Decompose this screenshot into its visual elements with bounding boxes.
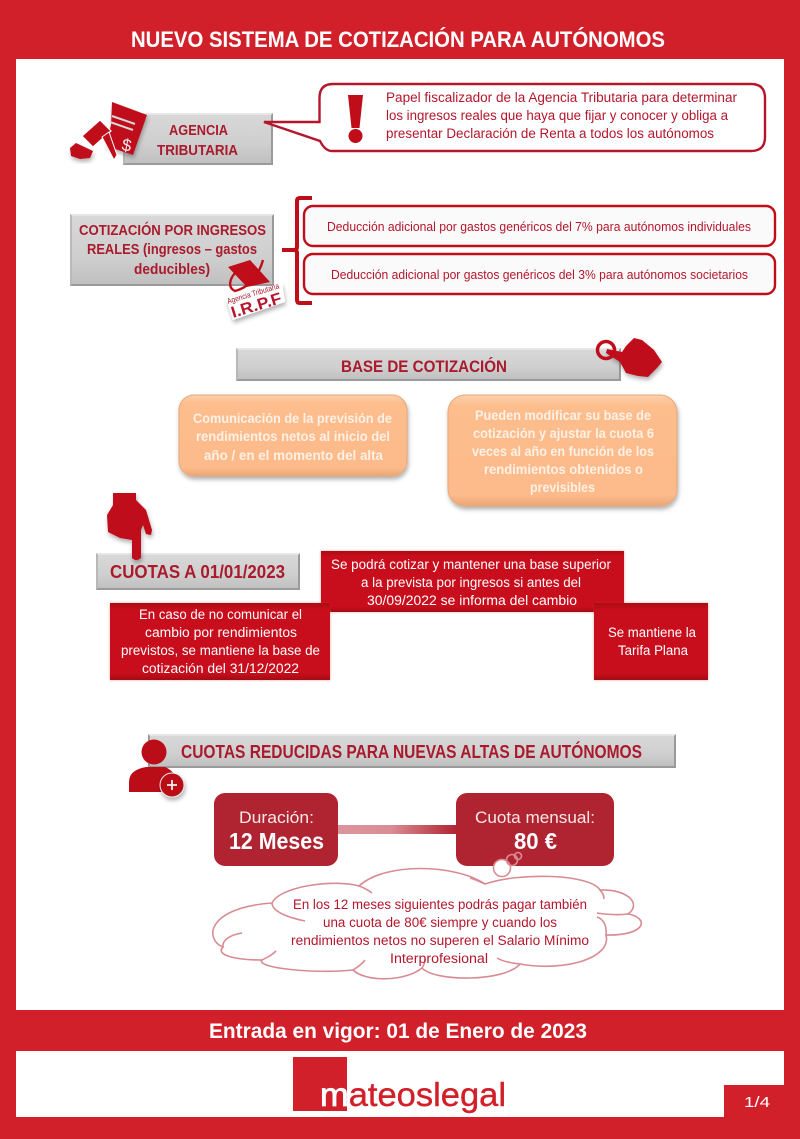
panel: no comunicar cambio: cambio por rendimientos	[145, 625, 297, 640]
panel: base superior: Se podrá cotizar y mantener una base superior	[331, 557, 611, 572]
footer heading: Entrada en vigor: 01 de Enero de 2023	[209, 1020, 587, 1043]
panel: tarifa plana: Tarifa Plana	[618, 643, 688, 658]
icon: IRPF stamp	[226, 260, 285, 322]
panel: tarifa plana	[594, 603, 708, 680]
heading: cuotas a 01/01/2023: CUOTAS A 01/01/2023	[110, 562, 285, 582]
connector	[338, 825, 456, 834]
icon: gavel and tax document	[70, 102, 147, 160]
page number: 1/4	[744, 1094, 770, 1111]
panel: no comunicar cambio	[110, 603, 330, 680]
panel: duración	[214, 793, 338, 866]
panel: comunicación de la previsión: rendimientos netos al inicio del	[196, 429, 390, 444]
icon: hand pointing down	[107, 493, 152, 560]
panel: no comunicar cambio: previstos, se mantiene la base de	[121, 643, 320, 658]
panel: base superior: a la prevista por ingresos si antes del	[361, 575, 581, 590]
icon: user with plus	[129, 740, 184, 797]
title: NUEVO SISTEMA DE COTIZACIÓN PARA AUTÓNOMOS	[131, 27, 665, 52]
cloud callout: rendimientos netos no superen el Salario Mínimo	[291, 933, 589, 948]
callout text	[386, 90, 737, 141]
heading: base de cotización: BASE DE COTIZACIÓN	[341, 357, 507, 376]
callout text: Papel fiscalizador de la Agencia Tributaria para determinar	[386, 90, 737, 105]
panel: comunicación de la previsión: año / en el momento del alta	[204, 448, 383, 463]
panel: cuota mensual	[456, 793, 614, 866]
heading: base de cotización	[236, 348, 621, 381]
icon: IRPF stamp: Agencia Tributaria	[226, 281, 281, 306]
heading: cuotas reducidas	[148, 734, 676, 768]
panel: modificar base de cotización: veces al año en función de los	[472, 444, 654, 459]
panel: base superior	[321, 551, 624, 612]
panel: comunicación de la previsión	[179, 395, 407, 476]
panel: modificar base de cotización	[448, 395, 677, 506]
panel: duración: Duración:	[239, 808, 314, 827]
logo: mateoslegal: mateoslegal	[320, 1076, 506, 1113]
icon: IRPF stamp: I.R.P.F	[229, 290, 284, 322]
panel: duración: 12 Meses	[229, 828, 324, 854]
panel: Agencia Tributaria: TRIBUTARIA	[157, 143, 238, 159]
panel: deducción individuales: Deducción adicional por gastos genéricos del 7% para autónomos individuales	[327, 219, 751, 234]
panel: Agencia Tributaria	[123, 113, 273, 165]
cloud callout	[213, 852, 641, 979]
panel: modificar base de cotización: Pueden modificar su base de	[475, 408, 651, 423]
panel: modificar base de cotización: previsibles	[530, 480, 595, 495]
panel: cotización por ingresos reales	[70, 214, 274, 286]
bracket	[282, 198, 312, 303]
logo: mateoslegal	[293, 1057, 506, 1113]
icon: gavel and tax document: $	[120, 135, 133, 156]
panel: cotización por ingresos reales: COTIZACIÓN POR INGRESOS	[79, 221, 266, 239]
panel: modificar base de cotización: cotización y ajustar la cuota 6	[473, 426, 654, 441]
heading: cuotas reducidas: CUOTAS REDUCIDAS PARA NUEVAS ALTAS DE AUTÓNOMOS	[181, 741, 642, 762]
cloud callout: Interprofesional	[390, 951, 488, 966]
callout text: presentar Declaración de Renta a todos los autónomos	[386, 126, 714, 141]
panel: no comunicar cambio: En caso de no comunicar el	[139, 607, 302, 622]
callout: Agencia Tributaria	[264, 84, 765, 151]
panel: cotización por ingresos reales: REALES (ingresos – gastos	[87, 242, 257, 258]
cloud callout: una cuota de 80€ siempre y cuando los	[323, 915, 557, 930]
heading: cuotas a 01/01/2023	[96, 553, 300, 590]
icon: pointing hand with touch ring	[598, 338, 662, 377]
callout text: los ingresos reales que haya que fijar y conocer y obliga a	[386, 108, 728, 123]
panel: cuota mensual: Cuota mensual:	[475, 808, 595, 827]
panel: deducción societarios: Deducción adicional por gastos genéricos del 3% para autónomos societarios	[331, 267, 748, 282]
panel: Agencia Tributaria: AGENCIA	[169, 123, 228, 139]
panel: deducción societarios	[304, 254, 775, 294]
panel: modificar base de cotización: rendimientos obtenidos o	[484, 462, 643, 477]
panel: deducción individuales	[304, 206, 775, 246]
panel: base superior: 30/09/2022 se informa del cambio	[367, 593, 577, 608]
panel: tarifa plana: Se mantiene la	[608, 625, 696, 640]
cloud callout: En los 12 meses siguientes podrás pagar también	[293, 897, 587, 912]
panel: no comunicar cambio: cotización del 31/12/2022	[142, 661, 299, 676]
panel: comunicación de la previsión: Comunicación de la previsión de	[193, 411, 392, 426]
panel: cuota mensual: 80 €	[514, 828, 557, 854]
panel: cotización por ingresos reales: deducibles)	[134, 262, 210, 278]
icon: exclamation mark	[348, 95, 363, 143]
